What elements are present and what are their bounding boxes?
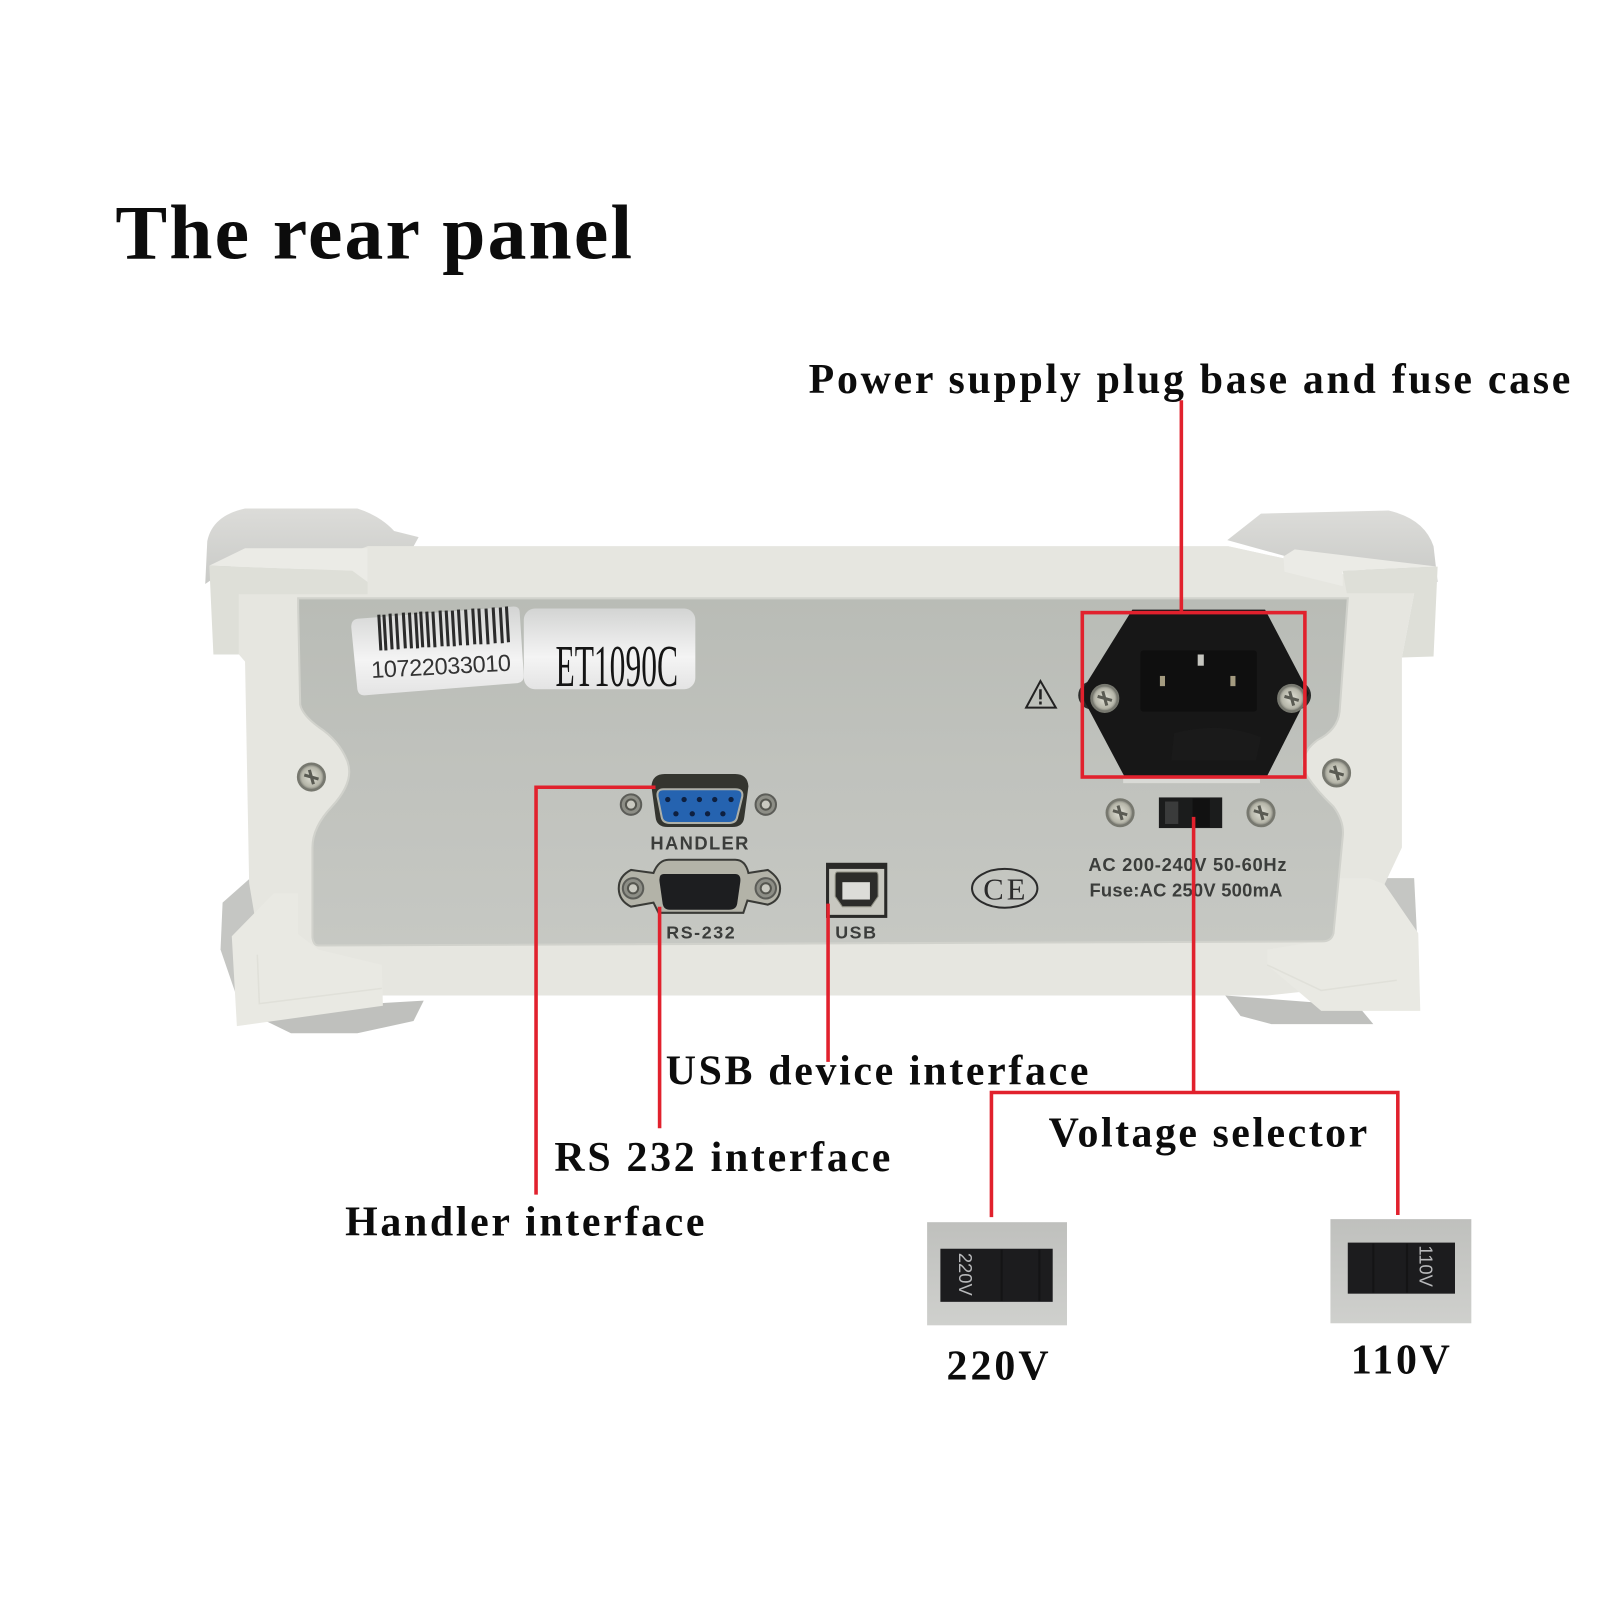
CE mark: E [1007,873,1025,907]
red callout lines [536,400,1398,1217]
switch detail: 110V: 110V [1415,1245,1436,1288]
title: The rear panel [115,189,632,275]
barcode label [351,607,524,695]
label: power supply: Power supply plug base and fuse case [809,357,1570,403]
USB port: USB [835,922,876,942]
RS-232 port: RS-232 [666,922,735,942]
corner block: bottom left [232,893,383,1026]
grey rear plate [298,598,1348,945]
label: RS 232 interface: RS 232 interface [554,1135,890,1181]
label: handler interface: Handler interface [345,1199,705,1245]
power socket and fuse case [1078,610,1311,783]
corner block: top left [209,548,368,654]
voltage switch [1159,797,1222,828]
CE mark [972,869,1037,908]
switch detail: 110V [1330,1219,1471,1323]
power ratings text: Fuse:AC 250V 500mA [1089,879,1282,900]
label: 110V: 110V [1351,1337,1450,1383]
CE mark: C [983,873,1004,907]
device rear view [205,508,1438,1033]
label: voltage selector: Voltage selector [1049,1111,1367,1157]
barcode label: 10722033010 [371,650,512,683]
label: USB device interface: USB device interface [666,1048,1088,1094]
warning triangle [1026,681,1056,708]
power ratings text: AC 200-240V 50-60Hz [1088,854,1287,875]
outer frame [239,546,1414,996]
USB port [826,863,887,942]
top band [352,546,1284,598]
frame screws [298,760,1350,826]
switch detail: 220V: 220V [955,1253,976,1296]
model label: ET1090C [555,633,678,699]
label: 220V: 220V [947,1343,1049,1389]
model label [524,609,695,699]
corner block: bottom right [1267,878,1420,1011]
handler port: HANDLER [650,833,748,854]
back feet [205,508,1438,1033]
power ratings text [1088,854,1287,900]
switch detail: 220V [927,1222,1067,1325]
handler port [621,774,776,854]
corner block: top right [1283,549,1438,658]
RS-232 port [619,860,780,942]
